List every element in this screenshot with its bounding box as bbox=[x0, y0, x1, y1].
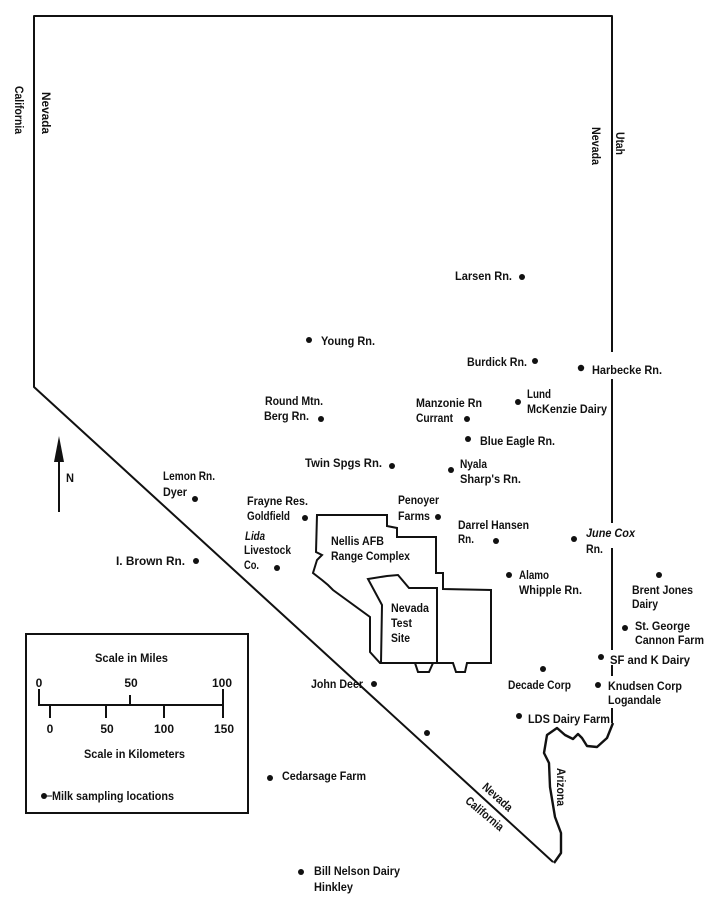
site labels and markers: Alamo bbox=[519, 568, 549, 582]
site labels and markers: Nyala bbox=[460, 457, 487, 471]
north arrow bbox=[54, 436, 74, 512]
site labels and markers: Logandale bbox=[608, 693, 661, 707]
site labels and markers: Burdick Rn. bbox=[467, 355, 527, 369]
scale bar: 100 bbox=[154, 722, 174, 736]
label: Nevada Test Site: Test bbox=[391, 616, 412, 630]
site labels and markers: Blue Eagle Rn. bbox=[480, 434, 555, 448]
site labels and markers: June Cox bbox=[586, 526, 636, 540]
site labels and markers: I. Brown Rn. bbox=[116, 554, 185, 568]
site labels and markers: McKenzie Dairy bbox=[527, 402, 607, 416]
site labels and markers: Frayne Res. bbox=[247, 494, 308, 508]
site labels and markers: Rn. bbox=[458, 532, 474, 546]
scale bar bbox=[36, 651, 234, 761]
site labels and markers: Lund bbox=[527, 387, 551, 401]
border labels: Nevada bbox=[589, 127, 603, 165]
site labels and markers: Sharp's Rn. bbox=[460, 472, 521, 486]
site labels and markers: Knudsen Corp bbox=[608, 679, 682, 693]
legend entry: milk sampling locations: Milk sampling locations bbox=[52, 789, 174, 803]
site labels and markers: Penoyer bbox=[398, 493, 439, 507]
border labels: Nevada bbox=[39, 92, 53, 134]
site labels and markers: Goldfield bbox=[247, 509, 290, 523]
legend panel bbox=[26, 634, 248, 813]
site labels and markers: Brent Jones bbox=[632, 583, 693, 597]
site labels and markers: Larsen Rn. bbox=[455, 269, 512, 283]
site labels and markers: Lida bbox=[245, 529, 265, 543]
site labels and markers: Livestock bbox=[244, 543, 291, 557]
scale bar: Scale in Miles bbox=[95, 651, 168, 665]
scale bar: 100 bbox=[212, 676, 232, 690]
site labels and markers: Young Rn. bbox=[321, 334, 375, 348]
site labels and markers: Manzonie Rn bbox=[416, 396, 482, 410]
site labels and markers bbox=[116, 269, 704, 894]
site labels and markers: Darrel Hansen bbox=[458, 518, 529, 532]
border labels: California bbox=[12, 86, 26, 134]
site labels and markers: Decade Corp bbox=[508, 678, 571, 692]
site labels and markers: Hinkley bbox=[314, 880, 353, 894]
scale bar: 50 bbox=[124, 676, 138, 690]
state border: Nevada bbox=[34, 16, 612, 862]
site labels and markers: Harbecke Rn. bbox=[592, 363, 662, 377]
label: Nevada Test Site bbox=[391, 601, 429, 645]
scale bar: 0 bbox=[36, 676, 43, 690]
label: Nevada Test Site: Nevada bbox=[391, 601, 429, 615]
north arrow: N bbox=[66, 471, 74, 485]
label: Nevada Test Site: Site bbox=[391, 631, 410, 645]
border labels: Utah bbox=[613, 132, 627, 155]
site labels and markers: Rn. bbox=[586, 542, 603, 556]
scale bar: 50 bbox=[100, 722, 114, 736]
site labels and markers: LDS Dairy Farm bbox=[528, 712, 610, 726]
label: Nellis AFB Range Complex bbox=[331, 534, 410, 563]
Colorado River border with Arizona bbox=[544, 723, 613, 863]
site labels and markers: Berg Rn. bbox=[264, 409, 309, 423]
site labels and markers: Bill Nelson Dairy bbox=[314, 864, 400, 878]
site labels and markers: Round Mtn. bbox=[265, 394, 323, 408]
border labels: Nevada bbox=[479, 780, 516, 814]
site labels and markers: Dyer bbox=[163, 485, 187, 499]
border labels: Arizona bbox=[554, 768, 568, 806]
site labels and markers: Cedarsage Farm bbox=[282, 769, 366, 783]
site labels and markers: Dairy bbox=[632, 597, 658, 611]
site labels and markers: Twin Spgs Rn. bbox=[305, 456, 382, 470]
site labels and markers: Lemon Rn. bbox=[163, 469, 215, 483]
site labels and markers: Co. bbox=[244, 558, 259, 572]
scale bar: 0 bbox=[47, 722, 54, 736]
scale bar: 150 bbox=[214, 722, 234, 736]
site labels and markers: Farms bbox=[398, 509, 430, 523]
border labels bbox=[12, 86, 627, 834]
site labels and markers: John Deer bbox=[311, 677, 363, 691]
label: Nellis AFB Range Complex: Range Complex bbox=[331, 549, 410, 563]
site labels and markers: St. George bbox=[635, 619, 690, 633]
scale bar: Scale in Kilometers bbox=[84, 747, 185, 761]
site labels and markers: Whipple Rn. bbox=[519, 583, 582, 597]
site labels and markers: SF and K Dairy bbox=[610, 653, 690, 667]
label: Nellis AFB Range Complex: Nellis AFB bbox=[331, 534, 384, 548]
region: Nevada Test Site bbox=[368, 575, 437, 663]
site labels and markers: Currant bbox=[416, 411, 453, 425]
region: Nellis AFB Range Complex bbox=[313, 515, 491, 672]
border labels: California bbox=[463, 794, 507, 834]
